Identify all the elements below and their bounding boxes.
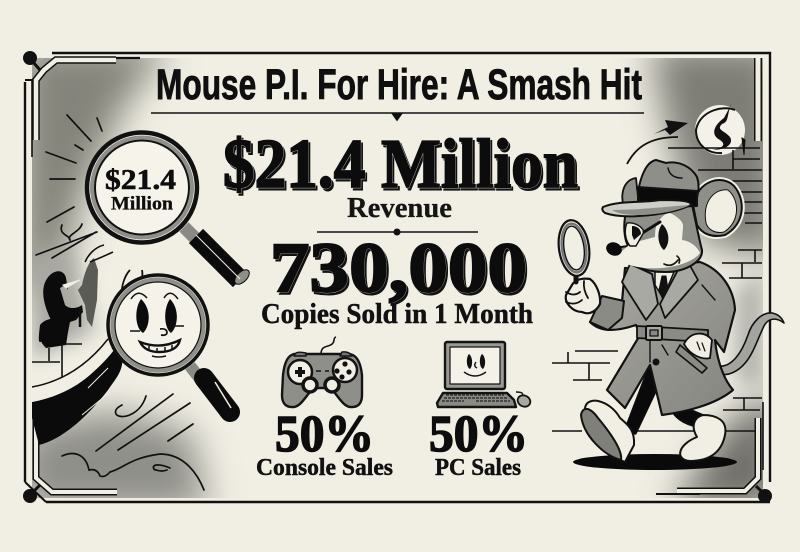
right shoe — [680, 415, 725, 461]
title underline — [151, 113, 644, 120]
magnifier: smiling face — [108, 275, 231, 412]
headline stat: revenue figure: $21.4 Million — [223, 126, 578, 203]
lens ring — [87, 132, 197, 242]
divider with dot — [317, 228, 478, 236]
headline stat: copies sold figure: 730,000 — [272, 232, 529, 310]
left shoe — [581, 401, 634, 462]
magnifier handle — [190, 366, 231, 412]
coat button and lines — [650, 285, 715, 362]
background brick lines, right and left — [552, 148, 762, 431]
nose — [604, 240, 624, 258]
headline stat: copies sold figure: 730,000 — [270, 230, 527, 308]
lens ring — [108, 275, 208, 375]
icon: game controller — [282, 337, 362, 407]
magnifier handle — [184, 227, 252, 287]
raised sleeve — [590, 296, 624, 330]
pocket and gloved hand — [676, 334, 712, 373]
hat — [602, 160, 699, 216]
left illustration: black swoosh and silhouettes — [32, 245, 142, 445]
tail — [718, 313, 784, 374]
back leg — [622, 368, 664, 436]
eyes — [625, 223, 644, 246]
icon: smiling laptop with mouse — [437, 342, 532, 409]
trench coat — [590, 262, 735, 415]
detective mouse — [555, 160, 784, 470]
spiral icon with arrow — [627, 101, 745, 164]
headline stat: revenue figure: $21.4 Million — [223, 126, 578, 203]
cartoon face — [130, 293, 184, 357]
magnifier: revenue — [87, 132, 252, 287]
headline stat: copies sold figure: 730,000 — [270, 230, 527, 308]
revenue label: Revenue — [347, 192, 452, 224]
PC sales label: PC Sales — [435, 455, 521, 481]
ornate frame — [23, 51, 772, 503]
stat: console share: 50% — [275, 406, 374, 463]
belt and buckle — [637, 326, 708, 342]
headline stat: revenue figure: $21.4 Million — [225, 128, 580, 206]
console sales label: Console Sales — [256, 455, 393, 481]
head — [614, 205, 702, 272]
magnifier: revenue: Million — [111, 194, 173, 214]
stat: PC share: 50% — [429, 406, 528, 463]
handheld magnifier — [555, 218, 593, 282]
raised hand — [566, 279, 600, 313]
near ear — [693, 180, 742, 236]
far ear — [622, 178, 640, 216]
coat lapels and tie — [622, 262, 698, 320]
muzzle and eye patch — [616, 213, 700, 268]
silhouette: cloaked figure — [39, 271, 83, 348]
left illustration: motion lines — [36, 115, 204, 490]
copies sold label: Copies Sold in 1 Month — [261, 298, 533, 330]
title: Mouse P.I. For Hire: A Smash Hit — [156, 61, 642, 109]
ground shadow — [573, 454, 737, 470]
lens text: $21.4 — [105, 164, 176, 196]
